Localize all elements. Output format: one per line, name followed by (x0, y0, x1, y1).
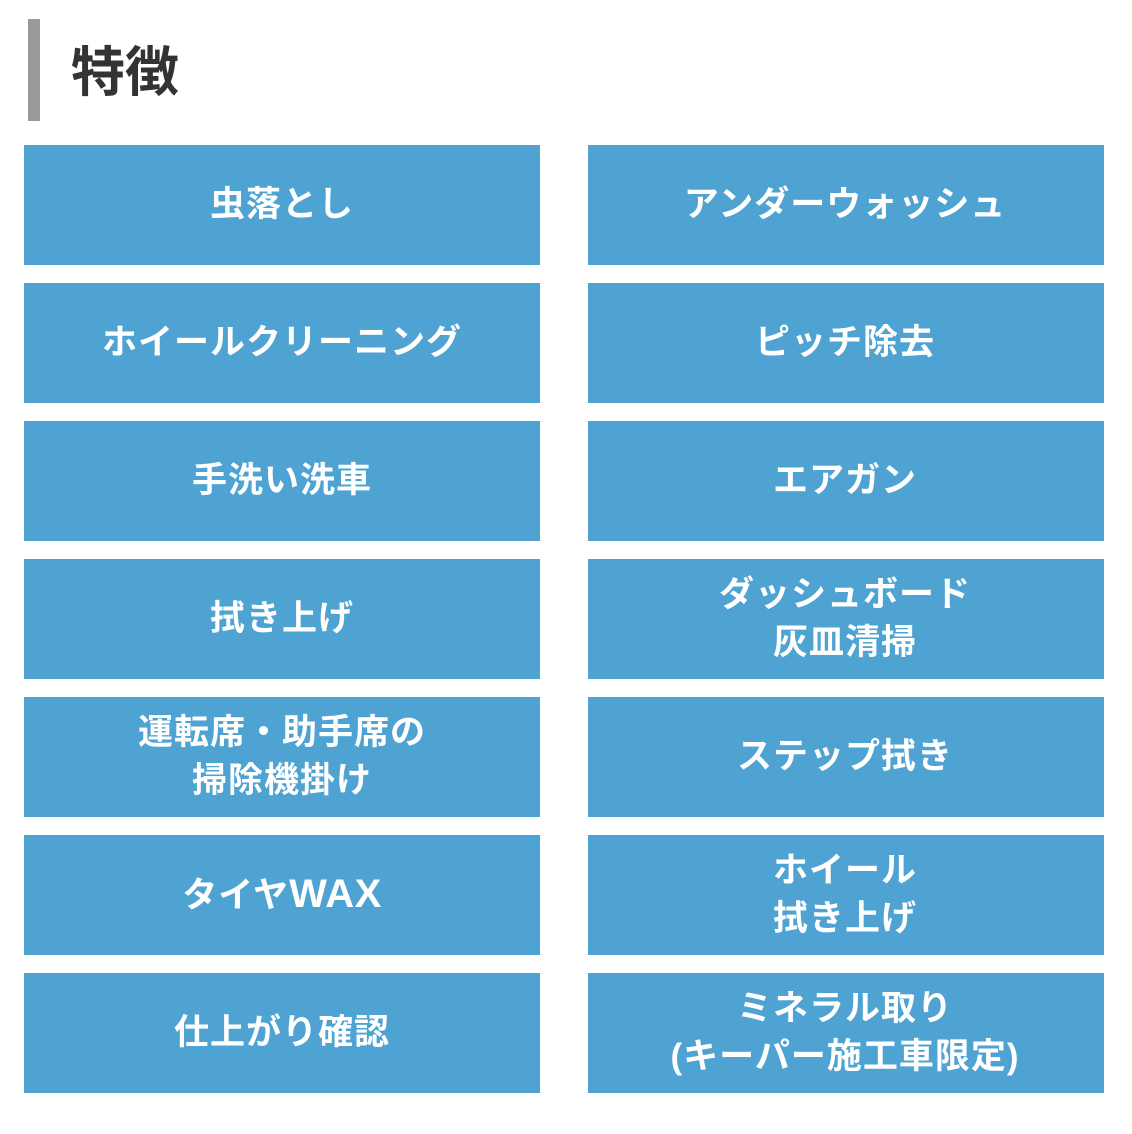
feature: 拭き上げ: 拭き上げ (210, 599, 354, 638)
feature: 運転席・助手席の掃除機掛け: 運転席・助手席の (138, 713, 426, 752)
feature: 虫落とし (24, 145, 540, 265)
feature: アンダーウォッシュ (588, 145, 1104, 265)
feature: 運転席・助手席の掃除機掛け (24, 697, 540, 817)
feature: ミネラル取り (588, 973, 1104, 1093)
feature: ステップ拭き: ステップ拭き (737, 737, 953, 776)
feature: ダッシュボード灰皿清掃: ダッシュボード (719, 575, 971, 614)
heading accent bar (28, 19, 40, 121)
feature: ステップ拭き (588, 697, 1104, 817)
feature: 虫落とし: 虫落とし (210, 185, 354, 224)
feature: エアガン (588, 421, 1104, 541)
feature: タイヤWAX: タイヤWAX (182, 872, 382, 916)
feature: 手洗い洗車: 手洗い洗車 (192, 461, 372, 500)
feature: ダッシュボード灰皿清掃 (588, 559, 1104, 679)
feature: 手洗い洗車 (24, 421, 540, 541)
feature: ホイール拭き上げ: 拭き上げ (773, 899, 917, 938)
feature: ピッチ除去 (588, 283, 1104, 403)
heading text: 特徴 (71, 43, 179, 103)
feature: ホイールクリーニング (24, 283, 540, 403)
feature: ホイールクリーニング: ホイールクリーニング (102, 323, 462, 362)
feature: 仕上がり確認 (24, 973, 540, 1093)
feature: ダッシュボード灰皿清掃: 灰皿清掃 (773, 623, 917, 662)
heading: 特徴 (28, 19, 179, 121)
feature: 運転席・助手席の掃除機掛け: 掃除機掛け (192, 761, 372, 800)
feature: タイヤWAX (24, 835, 540, 955)
feature: 拭き上げ (24, 559, 540, 679)
feature: アンダーウォッシュ: アンダーウォッシュ (684, 185, 1006, 224)
feature: ホイール拭き上げ: ホイール (773, 851, 917, 890)
feature: エアガン: エアガン (773, 461, 917, 500)
feature: ピッチ除去: ピッチ除去 (755, 323, 935, 362)
feature: ミネラル取り: ミネラル取り (737, 989, 953, 1028)
feature: 仕上がり確認: 仕上がり確認 (174, 1013, 390, 1052)
feature: ミネラル取り: (キーパー施工車限定) (671, 1037, 1019, 1076)
feature: ホイール拭き上げ (588, 835, 1104, 955)
